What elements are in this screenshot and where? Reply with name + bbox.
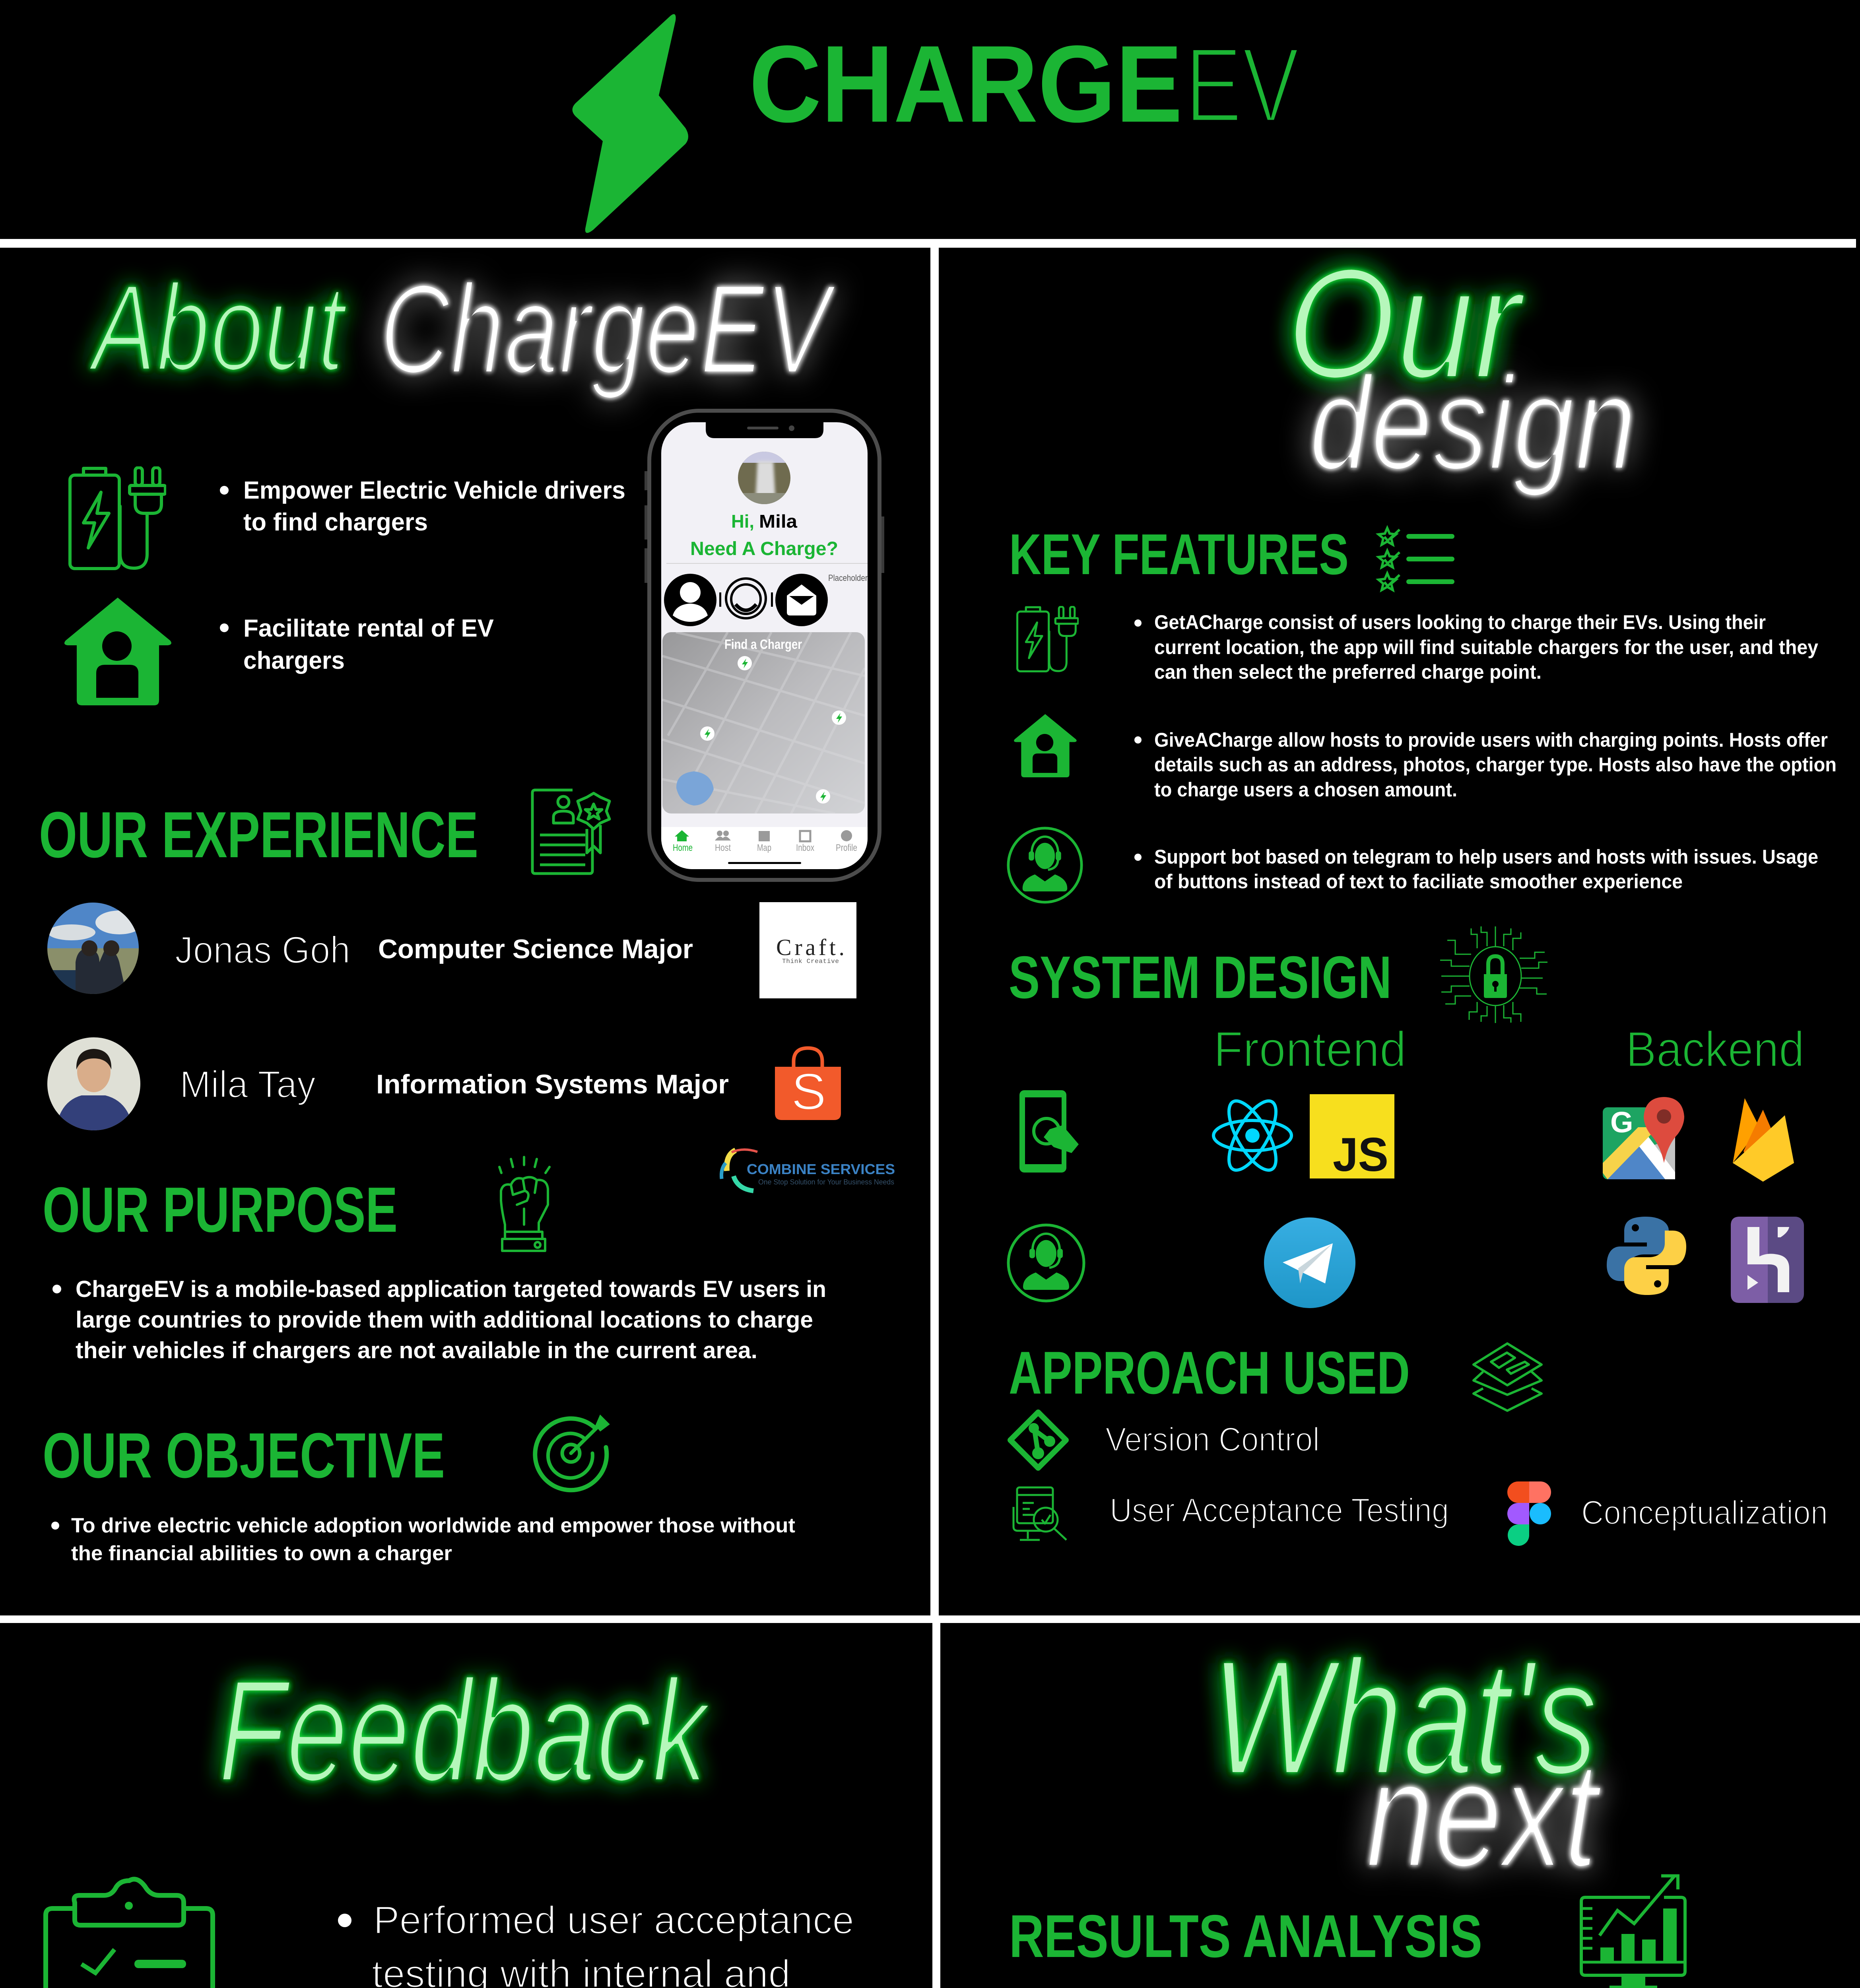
- map pins: [700, 656, 846, 804]
- text block: GetACharge: GetACharge consist of users looking to charge their EVs. Using their: [1154, 611, 1766, 633]
- header logo: [573, 14, 1300, 233]
- icon: certificate: [532, 790, 610, 874]
- icon: house: [1014, 714, 1077, 777]
- app tab bar: Profile: [836, 843, 857, 853]
- photo: Mila Tay: [47, 1037, 141, 1130]
- heading: next: next: [1365, 1730, 1602, 1899]
- heading: design: design: [1309, 349, 1637, 498]
- label: conceptualization: Conceptualization: [1581, 1494, 1828, 1531]
- text block: purpose: large countries to provide them with additional locations to charge: [76, 1307, 813, 1333]
- heading: approach used: APPROACH USED: [1009, 1339, 1410, 1407]
- text block: purpose: ChargeEV is a mobile-based application targeted towards EV users in: [76, 1276, 826, 1302]
- icon: phone touch: [1019, 1090, 1079, 1173]
- role: computer science major: Computer Science Major: [378, 934, 693, 964]
- heading: Feedback: Feedback: [218, 1650, 713, 1812]
- title: EV: EV: [1185, 25, 1300, 144]
- text block: empower drivers: Empower Electric Vehicle drivers: [243, 477, 625, 504]
- text block: GetACharge: current location, the app will find suitable chargers for the user, and they: [1154, 636, 1818, 658]
- logo: Combine Services: COMBINE SERVICES: [747, 1161, 895, 1177]
- text block: objective: the financial abilities to own a charger: [71, 1542, 452, 1565]
- text block: support bot: of buttons instead of text to faciliate smoother experience: [1154, 870, 1683, 893]
- text block: facilitate rental: [220, 615, 494, 674]
- text block: purpose: their vehicles if chargers are not available in the current area.: [76, 1338, 757, 1363]
- icon: google maps: G: [1610, 1106, 1633, 1139]
- text block: GiveACharge: GiveACharge allow hosts to provide users with charging points. Hosts offer: [1154, 729, 1828, 751]
- text block: GiveACharge: details such as an address, photos, charger type. Hosts also have the option: [1154, 753, 1837, 776]
- logo: Shopee bag: [775, 1048, 841, 1120]
- app tab bar: [673, 830, 857, 853]
- label: frontend: Frontend: [1213, 1022, 1406, 1077]
- icon: layers: [1474, 1343, 1542, 1411]
- panel: feedback: [40, 1650, 854, 1988]
- heading: results analysis: RESULTS ANALYSIS: [1009, 1903, 1482, 1970]
- text block: support bot: [1134, 846, 1818, 893]
- panel: what's next: [1000, 1626, 1859, 1988]
- app greeting: Mila: [759, 511, 797, 532]
- heading: What's: What's: [1211, 1626, 1598, 1808]
- icon: google maps: [1603, 1097, 1684, 1179]
- text block: facilitate rental: Facilitate rental of EV: [243, 615, 494, 642]
- heading: Our: Our: [1287, 235, 1527, 411]
- app subtitle: Need A Charge?: [690, 538, 838, 559]
- icon: house host: [64, 598, 171, 705]
- text block: purpose: [52, 1276, 826, 1363]
- icon: javascript: JS: [1333, 1128, 1388, 1181]
- icon: target: [535, 1416, 608, 1490]
- app placeholder label: Placeholder: [828, 573, 868, 583]
- label: backend: Backend: [1626, 1022, 1804, 1077]
- panel: about ChargeEV: [39, 258, 895, 1565]
- text block: GetACharge: can then select the preferred charge point.: [1154, 661, 1542, 683]
- text block: support bot: Support bot based on telegram to help users and hosts with issues. Usage: [1154, 846, 1818, 868]
- text block: empower drivers: to find chargers: [243, 509, 428, 536]
- text block: feedback bullets: [338, 1898, 854, 1988]
- heading: About: About: [86, 258, 348, 396]
- role: information systems major: Information Systems Major: [376, 1069, 729, 1099]
- text block: facilitate rental: chargers: [243, 647, 345, 674]
- phone mockup: [645, 411, 884, 880]
- name: Mila Tay: Mila Tay: [180, 1063, 316, 1106]
- heading: system design: SYSTEM DESIGN: [1009, 944, 1392, 1011]
- heading: our purpose: OUR PURPOSE: [43, 1174, 398, 1246]
- text block: objective: To drive electric vehicle adoption worldwide and empower those without: [71, 1514, 795, 1537]
- icon: circuit lock: [1440, 926, 1547, 1023]
- icon: firebase: [1733, 1098, 1794, 1182]
- label: version control: Version Control: [1105, 1421, 1320, 1458]
- logo: Combine Services: [721, 1149, 895, 1191]
- icon: raised fist: [499, 1157, 549, 1251]
- icon: support agent: [1008, 1225, 1084, 1301]
- app shortcut icons: [664, 574, 828, 626]
- text block: GetACharge: [1134, 611, 1818, 683]
- text block: feedback bullets: Performed user acceptance: [373, 1898, 854, 1942]
- icon: telegram: [1264, 1217, 1355, 1308]
- app greeting: Hi,: [731, 511, 754, 532]
- logo: Craft: Craft.: [776, 934, 845, 960]
- app greeting: [731, 511, 797, 532]
- title: CHARGE: CHARGE: [749, 23, 1182, 145]
- icon: git diamond: [1010, 1412, 1066, 1468]
- icon: monitor chart: [1581, 1876, 1685, 1988]
- logo: Craft: [759, 902, 856, 998]
- text block: empower drivers: [220, 477, 625, 536]
- icon: clipboard checklist: [46, 1879, 213, 1988]
- name: Jonas Goh: Jonas Goh: [175, 929, 350, 971]
- text block: GiveACharge: to charge users a chosen amount.: [1154, 779, 1457, 801]
- icon: figma: [1507, 1481, 1551, 1546]
- icon: python: [1607, 1217, 1686, 1295]
- app tab bar: Home: [673, 843, 693, 853]
- icon: support agent: [1008, 828, 1081, 902]
- logo: Combine Services: One Stop Solution for Your Business Needs: [758, 1178, 894, 1186]
- icon: battery: [1017, 607, 1078, 671]
- text block: objective: [51, 1514, 795, 1565]
- panel: our design: [1008, 235, 1837, 1546]
- text block: GiveACharge: [1134, 729, 1837, 801]
- photo: Jonas Goh: [47, 903, 143, 998]
- icon: lightning bolt: [573, 14, 688, 233]
- icon: battery and plug: [70, 468, 165, 569]
- logo: Shopee bag: S: [791, 1062, 826, 1120]
- icon: heroku: [1731, 1217, 1804, 1303]
- icon: acceptance testing: [1013, 1487, 1066, 1540]
- heading: our objective: OUR OBJECTIVE: [43, 1420, 445, 1491]
- icon: react: [1213, 1094, 1291, 1177]
- map title: Find a Charger: [724, 637, 802, 652]
- app tab bar: Host: [715, 843, 731, 853]
- heading: ChargeEV: ChargeEV: [380, 258, 838, 401]
- app tab bar: Map: [757, 843, 771, 853]
- app tab bar: Inbox: [796, 843, 814, 853]
- app avatar: [738, 452, 790, 505]
- heading: key features: KEY FEATURES: [1009, 522, 1349, 586]
- app map: [662, 632, 865, 813]
- logo: Craft: Think Creative: [782, 958, 839, 965]
- label: user acceptance testing: User Acceptance Testing: [1110, 1491, 1449, 1529]
- heading: our experience: OUR EXPERIENCE: [39, 798, 478, 871]
- icon: star checklist: [1378, 528, 1454, 590]
- icon: javascript: [1310, 1094, 1394, 1181]
